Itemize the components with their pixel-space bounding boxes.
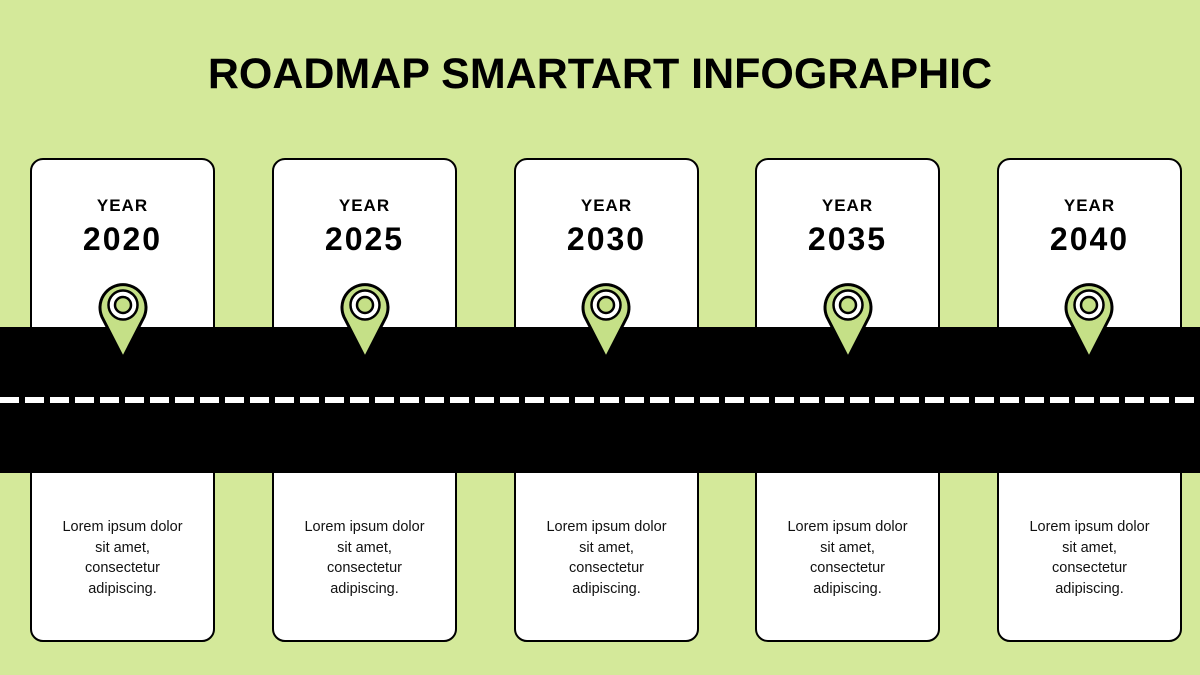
- card: 2035: consectetur: [810, 560, 885, 576]
- card: 2040: YEAR: [1064, 196, 1115, 215]
- card: 2035: [755, 158, 940, 642]
- card: 2040: sit amet,: [1062, 540, 1117, 556]
- card: 2030: Lorem ipsum dolor: [546, 519, 667, 535]
- card: 2030: 2030: [567, 221, 646, 257]
- card: 2035: Lorem ipsum dolor: [787, 519, 908, 535]
- card: 2030: consectetur: [569, 560, 644, 576]
- card: 2040: consectetur: [1052, 560, 1127, 576]
- card: 2020: 2020: [83, 221, 162, 257]
- card: 2025: sit amet,: [337, 540, 392, 556]
- icon: pin 2035: [824, 283, 872, 355]
- card: 2020: sit amet,: [95, 540, 150, 556]
- card: 2025: consectetur: [327, 560, 402, 576]
- card: 2025: 2025: [325, 221, 404, 257]
- card: 2035: adipiscing.: [813, 581, 882, 597]
- card: 2020: Lorem ipsum dolor: [62, 519, 183, 535]
- title: ROADMAP SMARTART INFOGRAPHIC: [208, 50, 992, 98]
- card: 2025: adipiscing.: [330, 581, 399, 597]
- card: 2025: Lorem ipsum dolor: [304, 519, 425, 535]
- card: 2030: sit amet,: [579, 540, 634, 556]
- card: 2020: [30, 158, 215, 642]
- card: 2025: [272, 158, 457, 642]
- icon: pin 2020: [98, 283, 148, 355]
- card: 2035: YEAR: [822, 196, 873, 215]
- icon: pin 2040: [1064, 283, 1114, 355]
- card: 2040: adipiscing.: [1055, 581, 1124, 597]
- card: 2030: YEAR: [581, 196, 632, 215]
- card: 2030: adipiscing.: [572, 581, 641, 597]
- card: 2025: YEAR: [339, 196, 390, 215]
- road dashed line: [0, 397, 1200, 403]
- card: 2040: [997, 158, 1182, 642]
- icon: pin 2025: [340, 283, 390, 355]
- icon: pin 2030: [582, 283, 630, 355]
- card: 2030: [514, 158, 699, 642]
- card: 2040: 2040: [1050, 221, 1129, 257]
- card: 2020: adipiscing.: [88, 581, 157, 597]
- card: 2035: 2035: [808, 221, 887, 257]
- card: 2035: sit amet,: [820, 540, 875, 556]
- card: 2020: YEAR: [97, 196, 148, 215]
- road: [0, 327, 1200, 473]
- card: 2040: Lorem ipsum dolor: [1029, 519, 1150, 535]
- card: 2020: consectetur: [85, 560, 160, 576]
